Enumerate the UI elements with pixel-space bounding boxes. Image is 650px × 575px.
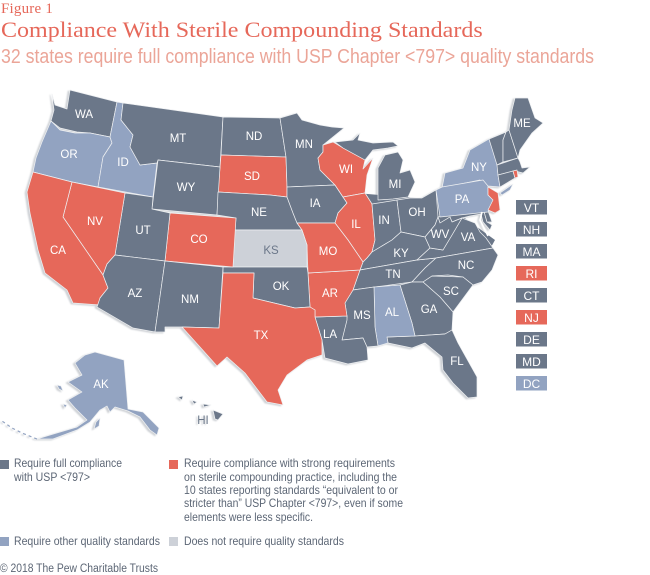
state: VT	[489, 132, 506, 165]
key: VT	[516, 200, 547, 215]
legend: full compliance: with USP <797>	[13, 471, 90, 484]
state: ME	[509, 98, 543, 158]
key: NH: NH	[523, 223, 540, 237]
key: DC: DC	[523, 377, 540, 391]
state: AL: AL	[385, 307, 400, 319]
state: NM	[155, 261, 223, 332]
legend: other quality standards: Require other quality standards	[14, 535, 160, 548]
key: NH	[516, 222, 547, 237]
key: DC	[516, 376, 547, 391]
state: WY	[152, 160, 220, 215]
state: HI: HI	[197, 415, 209, 427]
state: NV: NV	[87, 216, 103, 228]
legend	[0, 457, 403, 548]
state: NM: NM	[181, 294, 199, 306]
state: WY: WY	[177, 182, 196, 194]
state: AZ: AZ	[128, 288, 142, 300]
state: ME: ME	[513, 118, 531, 130]
state: OR	[33, 121, 112, 187]
state: MN: MN	[295, 139, 313, 151]
key: VT: VT	[524, 201, 540, 215]
key: RI	[516, 266, 547, 281]
state: MT: MT	[170, 133, 186, 145]
key: CT: CT	[524, 289, 540, 303]
state: IL	[335, 193, 375, 262]
state: NE: NE	[251, 207, 267, 219]
state: PA: PA	[455, 194, 470, 206]
state: AZ	[97, 255, 165, 332]
state: SD	[218, 155, 287, 197]
state: ID	[98, 102, 157, 197]
state: IN	[372, 200, 401, 252]
state: AR: AR	[322, 288, 338, 300]
legend: strong requirements: elements were less specific.	[184, 511, 313, 524]
state: LA: LA	[323, 329, 337, 341]
key: NJ	[516, 310, 547, 325]
state: IA: IA	[310, 198, 321, 210]
state: ND	[221, 117, 286, 157]
legend: full compliance: Require full compliance	[14, 457, 122, 470]
state: SD: SD	[244, 171, 260, 183]
state: OH	[397, 190, 438, 237]
state: TN: TN	[385, 269, 401, 281]
key: NJ: NJ	[524, 311, 539, 325]
state: OK: OK	[273, 281, 290, 293]
state: CO: CO	[190, 234, 208, 246]
state: NC	[412, 248, 498, 285]
state: KS	[233, 230, 307, 267]
state: MT	[121, 103, 223, 167]
map of the United States	[2, 90, 543, 439]
state: WA	[51, 90, 117, 137]
state: IA	[287, 185, 347, 223]
key: DE: DE	[523, 333, 540, 347]
legend: no quality standards: Does not require quality standards	[184, 535, 344, 548]
state: LA	[315, 316, 368, 364]
legend: strong requirements: Require compliance with strong requirements	[184, 457, 395, 470]
state: KY: KY	[393, 248, 409, 260]
state: TN	[353, 258, 436, 290]
northeast state key	[516, 200, 547, 391]
state: NJ	[488, 187, 500, 213]
state: AR	[308, 270, 360, 317]
state: NE	[217, 192, 302, 230]
state: GA	[400, 282, 453, 336]
state: DE	[483, 208, 492, 222]
key: MD: MD	[522, 355, 541, 369]
state: WV: WV	[431, 229, 450, 241]
state: UT	[115, 193, 170, 261]
state: KS: KS	[263, 245, 279, 257]
state: WI	[318, 142, 373, 197]
state: NC: NC	[458, 260, 474, 272]
state: VA: VA	[461, 232, 476, 244]
state: MO: MO	[319, 246, 337, 258]
legend: full compliance	[0, 457, 122, 484]
state: OR: OR	[60, 149, 78, 161]
state: ND: ND	[246, 131, 262, 143]
state: MN	[280, 113, 344, 187]
state: AL	[374, 285, 415, 346]
state: IL: IL	[351, 219, 361, 231]
key: MA: MA	[522, 245, 540, 259]
state: NV	[63, 182, 125, 275]
legend: strong requirements: 10 states reporting standards “equivalent to or	[184, 484, 398, 497]
state: SC	[423, 276, 473, 312]
state: NY	[442, 139, 513, 195]
key: DE	[516, 332, 547, 347]
legend: strong requirements	[169, 457, 403, 524]
title: Compliance With Sterile Compounding Standards	[1, 18, 483, 43]
state: OK	[223, 267, 310, 308]
state: MS	[342, 287, 378, 347]
state: WV	[425, 217, 462, 250]
state: CA	[27, 172, 108, 305]
state: WI: WI	[339, 164, 353, 176]
state: GA: GA	[421, 304, 438, 316]
state: MA	[497, 158, 530, 175]
state: AK: AK	[93, 379, 109, 391]
state: SC: SC	[443, 286, 459, 298]
key: MA	[516, 244, 547, 259]
state: FL: FL	[450, 356, 464, 368]
state: FL	[387, 330, 477, 398]
state: CO	[165, 213, 236, 267]
state: TX	[182, 273, 322, 405]
figure label: Figure 1	[1, 1, 53, 17]
state: TX: TX	[254, 330, 269, 342]
state: CA: CA	[50, 245, 66, 257]
state: KY	[360, 232, 430, 270]
state: MI	[335, 133, 415, 200]
state: CT	[498, 171, 515, 187]
state: OH: OH	[408, 207, 426, 219]
state: UT: UT	[135, 225, 151, 237]
key: RI: RI	[526, 267, 538, 281]
state: WA: WA	[75, 109, 93, 121]
state: MI: MI	[389, 179, 401, 191]
state: NY: NY	[471, 162, 487, 174]
legend: strong requirements: stricter than” USP Chapter <797>, even if some	[184, 497, 403, 510]
state: PA	[436, 180, 493, 217]
state: HI	[178, 396, 223, 427]
state: IN: IN	[378, 215, 390, 227]
state: NH	[503, 130, 518, 162]
state: ID: ID	[117, 157, 129, 169]
state: VA	[417, 218, 493, 260]
legend: strong requirements: on sterile compounding practice, including the	[184, 471, 397, 484]
state: MD	[438, 208, 492, 230]
key: MD	[516, 354, 547, 369]
state: MS: MS	[353, 310, 371, 322]
state: MO	[297, 223, 363, 273]
state: AK	[2, 352, 159, 439]
key: CT	[516, 288, 547, 303]
state: RI	[513, 170, 518, 178]
copyright: © 2018 The Pew Charitable Trusts	[0, 563, 158, 575]
